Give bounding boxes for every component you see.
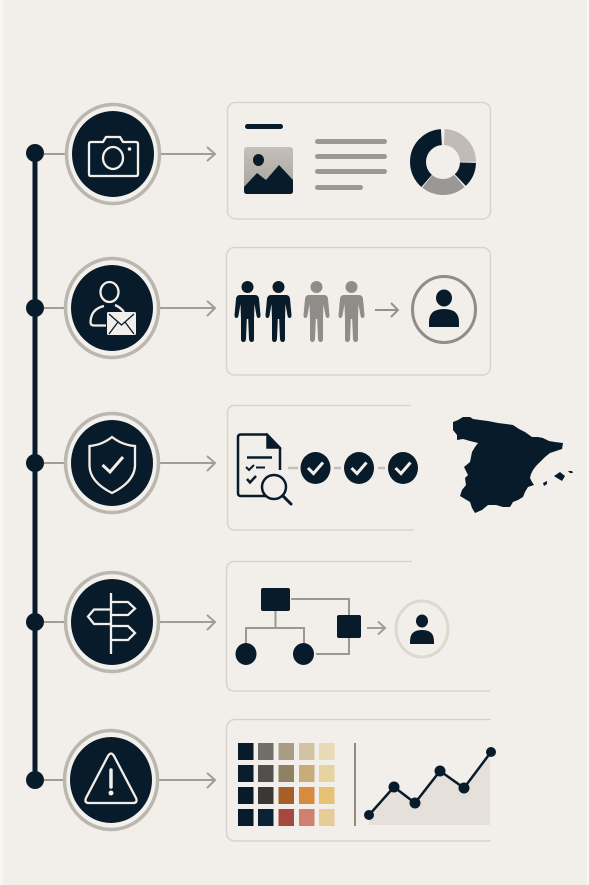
vertical timeline <box>26 144 44 789</box>
heading bar <box>245 124 283 129</box>
panel 2: selecting one person <box>226 248 490 375</box>
arrow <box>375 303 398 317</box>
check badge 2 <box>344 452 374 484</box>
icon: warning triangle <box>85 754 137 803</box>
check badge 1 <box>300 452 330 484</box>
divider <box>354 743 356 826</box>
step 2 badge: person with envelope <box>66 258 158 358</box>
text lines <box>315 139 387 190</box>
step 1 badge: camera <box>66 104 160 204</box>
step 4 badge: signpost <box>66 572 158 672</box>
panel 4: branching flow <box>226 562 490 691</box>
icon: shield with check <box>90 437 135 493</box>
flow connectors <box>246 599 349 654</box>
panel 1: media and data <box>228 102 490 219</box>
step 4 connector arrow <box>44 615 215 630</box>
flow nodes <box>236 588 361 665</box>
connectors <box>288 467 385 469</box>
step 3 connector arrow <box>44 456 215 471</box>
map of Spain <box>453 417 573 513</box>
panel 5: colour grid and trend <box>226 720 496 841</box>
icon: image placeholder <box>244 147 293 194</box>
donut chart <box>418 137 468 187</box>
panel 3: document review <box>228 406 418 530</box>
line chart <box>364 747 496 825</box>
icon: grey figures <box>304 281 364 342</box>
arrow <box>367 622 385 634</box>
icon: document with magnifier <box>238 434 291 504</box>
check badge 3 <box>388 452 418 484</box>
step 5 connector arrow <box>44 773 215 788</box>
colour swatch grid <box>238 743 334 826</box>
step 2 connector arrow <box>44 301 215 316</box>
icon: person in ring <box>396 601 448 657</box>
icon: camera <box>89 137 138 176</box>
step 1 connector arrow <box>44 147 215 161</box>
step 3 badge: shield <box>66 414 158 512</box>
icon: signpost <box>88 593 135 654</box>
icon: person and envelope <box>90 282 136 335</box>
icon: selected person <box>412 276 476 342</box>
step 5 badge: warning <box>64 730 158 830</box>
icon: dark figures <box>234 281 292 342</box>
